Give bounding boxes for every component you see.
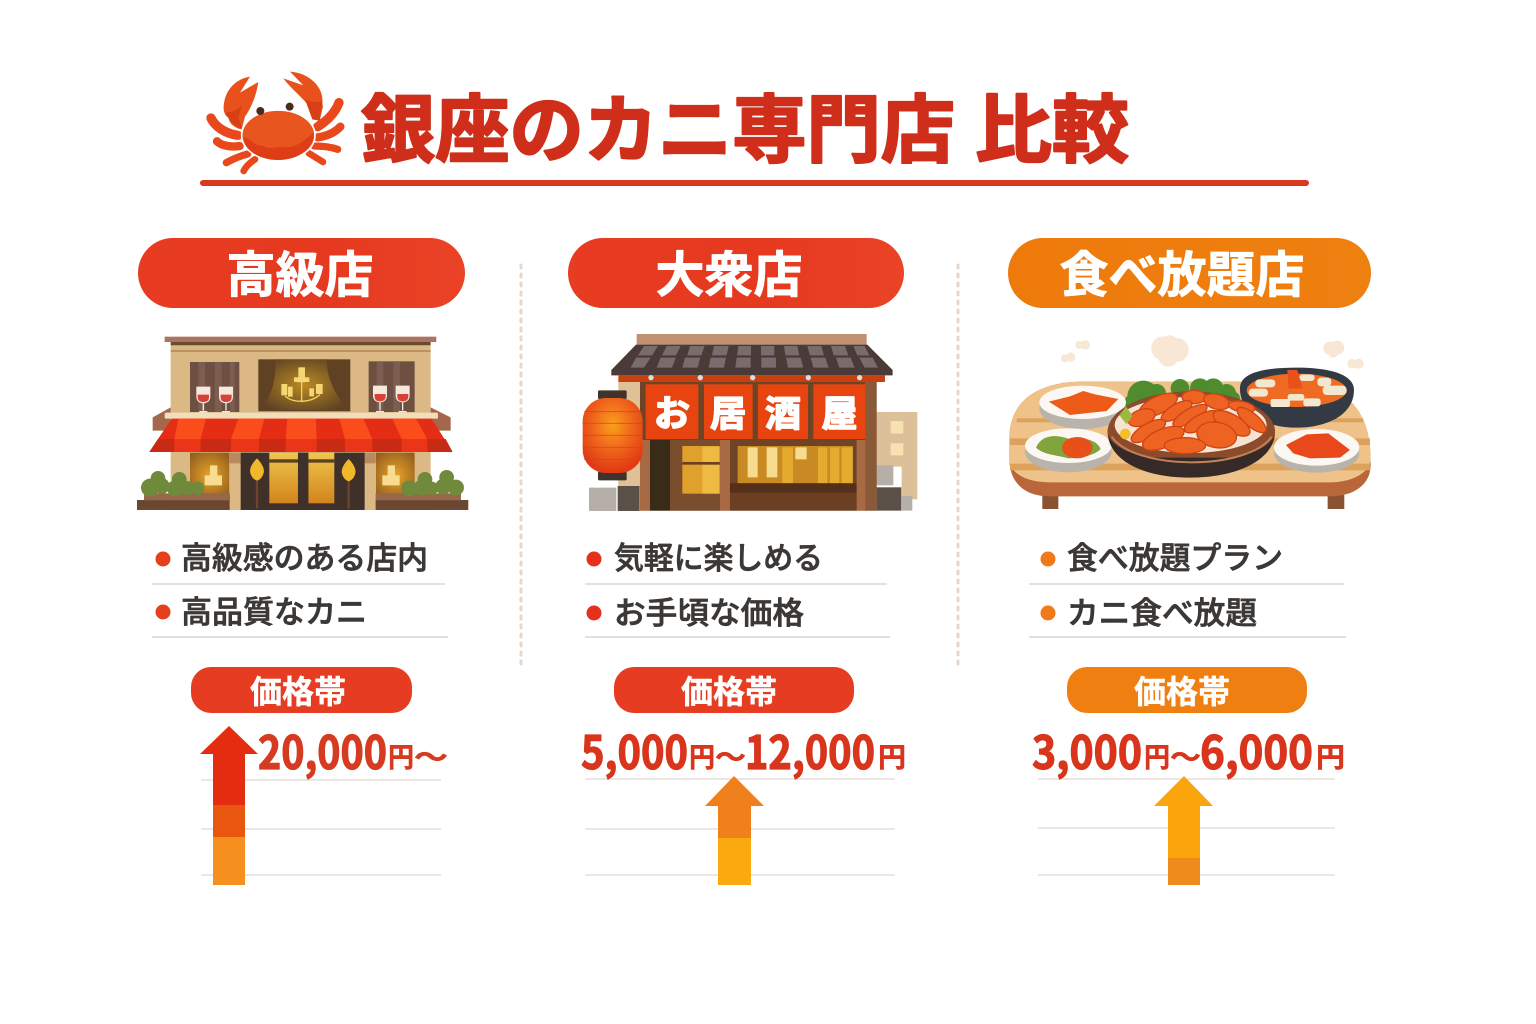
price chart: 食べ放題店: 円 xyxy=(1316,736,1345,775)
feature list: 高級店 xyxy=(152,533,448,637)
price chart: 大衆店 xyxy=(581,717,906,885)
price label pill: 高級店 xyxy=(191,667,412,713)
price chart: 大衆店: 12,000 xyxy=(745,717,875,783)
price label pill: 食べ放題店: 価格帯 xyxy=(1134,667,1230,713)
price chart: 大衆店: 円 xyxy=(689,736,715,775)
price chart: 食べ放題店: 6,000 xyxy=(1200,717,1313,783)
price chart: 食べ放題店 xyxy=(1032,717,1345,885)
feature list: 高級店: 高品質なカニ xyxy=(181,587,367,632)
title: 銀座のカニ専門店 xyxy=(361,71,955,178)
heading pill: 食べ放題店 xyxy=(1008,236,1371,308)
icon: crab xyxy=(211,72,340,171)
illustration: izakaya building xyxy=(583,334,917,511)
price label pill: 大衆店: 価格帯 xyxy=(681,667,777,713)
feature list: 大衆店: 気軽に楽しめる xyxy=(614,533,823,578)
price chart: 高級店: ～ xyxy=(414,736,448,775)
price label pill: 高級店: 価格帯 xyxy=(250,667,346,713)
feature list: 食べ放題店: カニ食べ放題 xyxy=(1067,588,1257,633)
illustration: izakaya building: 酒 xyxy=(765,385,801,437)
panel: 食べ放題店 xyxy=(1008,236,1371,885)
price label pill: 食べ放題店 xyxy=(1067,667,1307,713)
heading pill: 食べ放題店: 食べ放題店 xyxy=(1059,236,1305,307)
price chart: 大衆店: 5,000 xyxy=(581,717,688,783)
feature list: 食べ放題店: 食べ放題プラン xyxy=(1067,533,1283,578)
title underline xyxy=(200,180,1309,186)
illustration: izakaya building: 屋 xyxy=(821,385,857,437)
price chart: 高級店 xyxy=(200,717,448,885)
illustration: all-you-can-eat crab feast xyxy=(1009,335,1371,509)
illustration: luxury restaurant building xyxy=(137,337,468,510)
price chart: 食べ放題店: 円 xyxy=(1144,736,1170,775)
price label pill: 大衆店 xyxy=(614,667,854,713)
heading pill: 高級店: 高級店 xyxy=(226,236,374,307)
panel: 高級店 xyxy=(137,236,468,885)
illustration: izakaya building: 居 xyxy=(710,385,746,437)
heading pill: 大衆店 xyxy=(568,236,904,308)
title: 比較 xyxy=(975,71,1129,178)
price chart: 大衆店: ～ xyxy=(715,736,746,775)
feature list: 大衆店 xyxy=(585,533,890,637)
heading pill: 大衆店: 大衆店 xyxy=(655,236,803,307)
panel: 大衆店 xyxy=(568,236,917,885)
price chart: 高級店: 20,000 xyxy=(258,717,387,783)
price chart: 高級店: 円 xyxy=(388,736,414,775)
price chart: 食べ放題店: 3,000 xyxy=(1032,717,1142,783)
feature list: 大衆店: お手頃な価格 xyxy=(614,588,804,633)
price chart: 食べ放題店: ～ xyxy=(1170,736,1201,775)
illustration: izakaya building: お xyxy=(654,385,690,437)
feature list: 食べ放題店 xyxy=(1029,533,1346,637)
feature list: 高級店: 高級感のある店内 xyxy=(181,533,428,578)
price chart: 大衆店: 円 xyxy=(878,736,906,775)
heading pill: 高級店 xyxy=(138,236,465,308)
